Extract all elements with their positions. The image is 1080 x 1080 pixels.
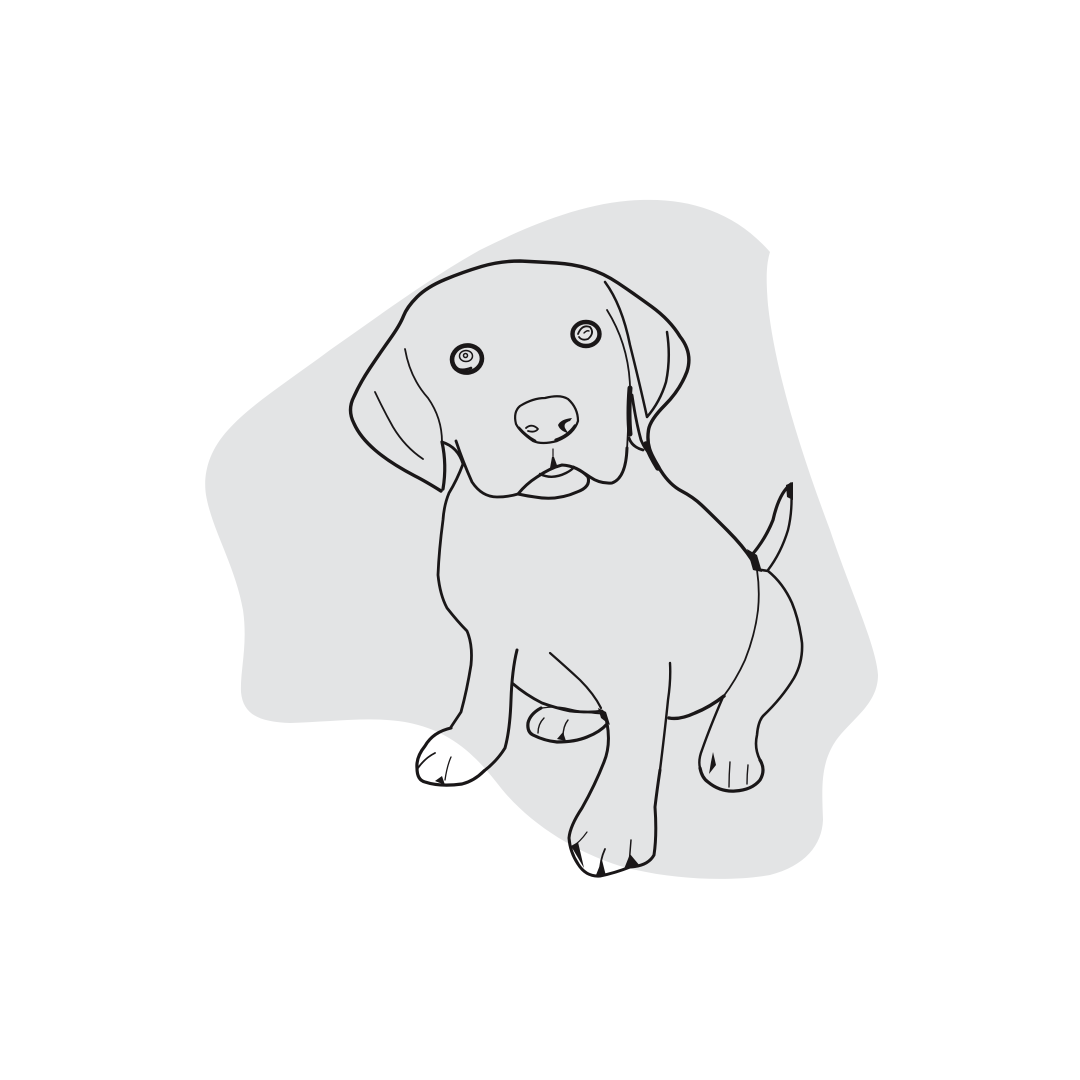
right ear details [605, 282, 669, 456]
head and ear outline, neck and back [350, 261, 762, 572]
raised paw [417, 650, 517, 785]
dog [350, 261, 802, 876]
left ear details [375, 392, 445, 489]
tail [751, 482, 793, 570]
front standing leg and paw [569, 663, 670, 876]
nostrils [526, 426, 538, 432]
left eye [450, 343, 484, 375]
belly and haunch line [669, 570, 759, 718]
chest, left shoulder and foreleg [438, 442, 472, 727]
background blob [205, 200, 878, 879]
face contour and jaw [405, 310, 630, 497]
nose [515, 396, 578, 443]
right eye [572, 322, 600, 346]
mouth and tongue [518, 449, 589, 498]
hind leg and paw [699, 569, 802, 791]
tucked hind paw [512, 653, 610, 742]
eyes [450, 322, 600, 375]
